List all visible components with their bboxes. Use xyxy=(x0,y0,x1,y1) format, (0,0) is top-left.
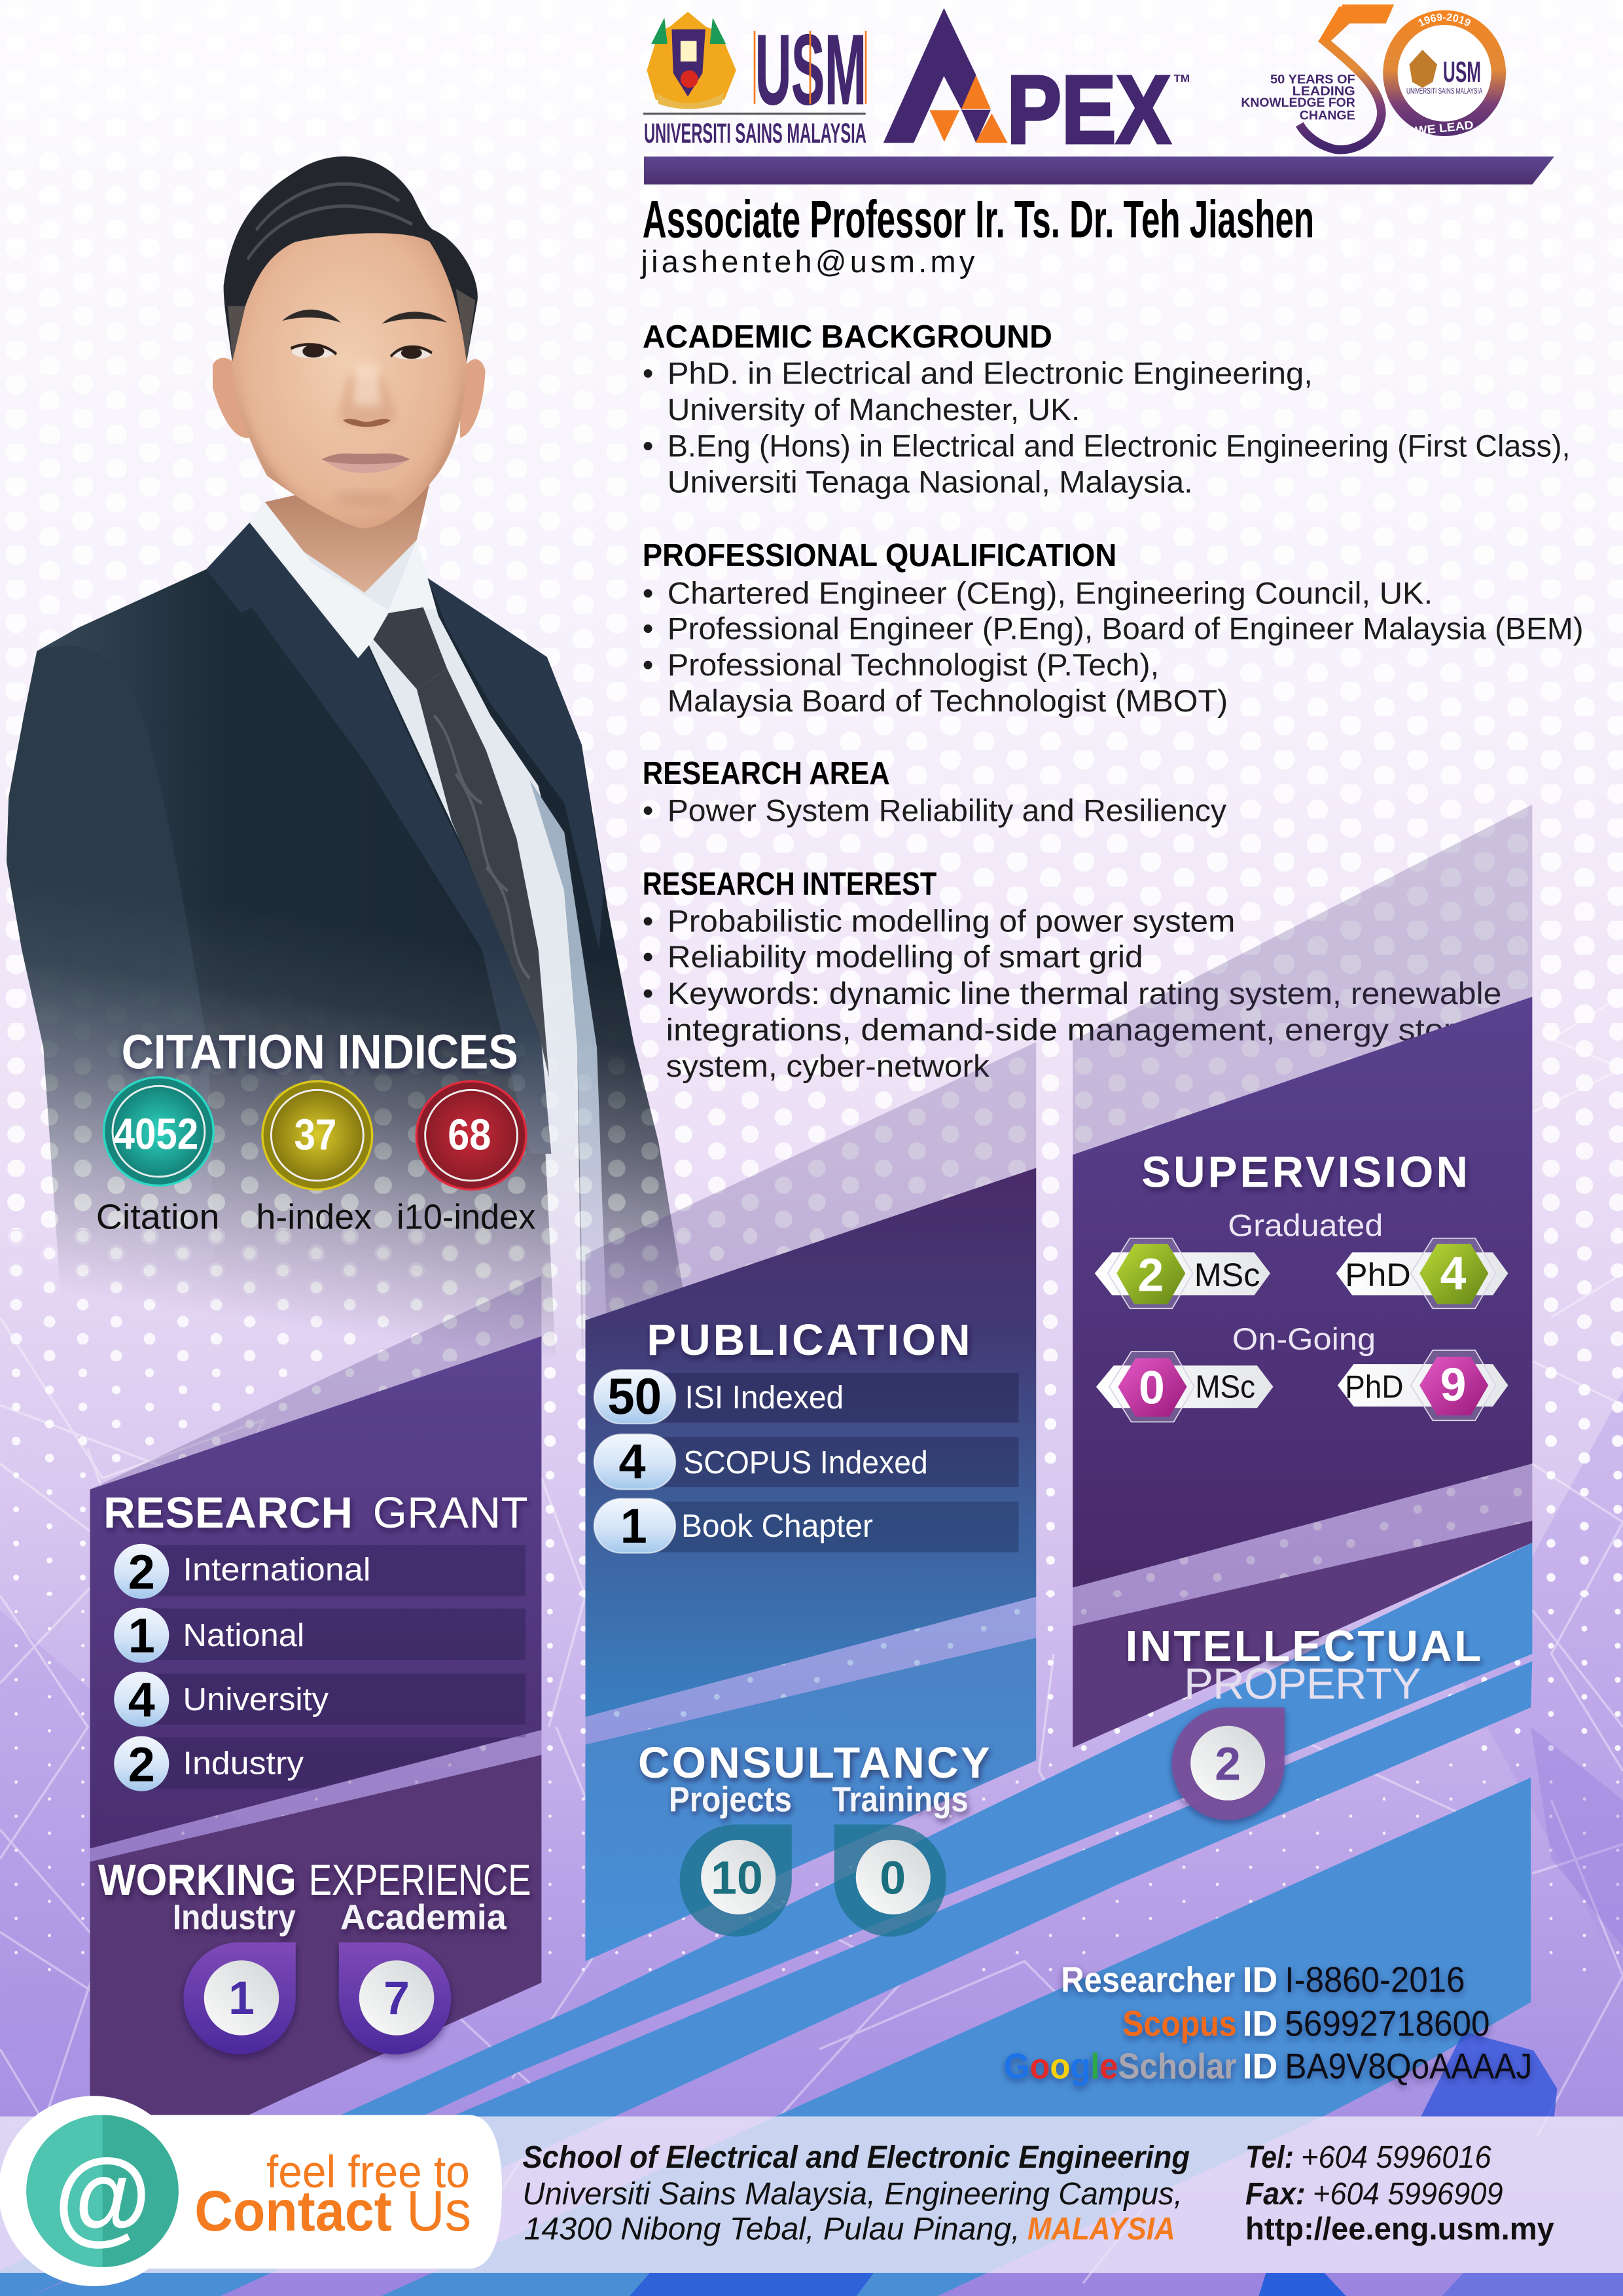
scopus id: Scopus xyxy=(1122,2003,1237,2044)
research interest xyxy=(643,866,1512,1084)
research grant heading: GRANT xyxy=(373,1488,528,1537)
professional qualification: Professional Technologist (P.Tech), xyxy=(668,648,1159,683)
university name: UNIVERSITI SAINS MALAYSIA xyxy=(644,118,866,149)
halftone dots over suit xyxy=(46,1067,679,1274)
contact details: http://ee.eng.usm.my xyxy=(1245,2211,1554,2246)
on-going MSc badge: MSc xyxy=(1195,1369,1255,1405)
ring xyxy=(1390,18,1499,129)
trainings label: Trainings xyxy=(832,1780,969,1820)
row: international: International xyxy=(183,1551,370,1587)
trademark: TM xyxy=(1173,73,1190,84)
usm wordmark: USM xyxy=(755,14,866,126)
researcher id: ID xyxy=(1243,1960,1277,2000)
academia label: Academia xyxy=(340,1897,507,1937)
academic background: • xyxy=(643,429,653,464)
academic background xyxy=(643,319,1570,500)
lower background bands xyxy=(0,1543,1623,2296)
apex wordmark: PEX xyxy=(1007,56,1171,164)
contact us: Contact Us xyxy=(194,2179,471,2243)
row: university xyxy=(114,1672,526,1727)
contact details: +604 5996909 xyxy=(1313,2176,1503,2212)
academia drop badge: 7 xyxy=(383,1972,410,2024)
academic background: • xyxy=(643,357,653,391)
graduated PhD badge: 4 xyxy=(1440,1247,1467,1300)
row: book chapter: 1 xyxy=(620,1499,647,1553)
trainings drop badge: 0 xyxy=(880,1852,906,1905)
tagline: LEADING xyxy=(1293,84,1355,98)
on-going PhD badge: 9 xyxy=(1440,1359,1466,1411)
projects label: Projects xyxy=(669,1780,792,1820)
graduated MSc badge: MSc xyxy=(1194,1256,1260,1293)
professional qualification: • xyxy=(643,577,653,611)
citation labels: i10-index xyxy=(397,1198,536,1237)
panel: research grant xyxy=(90,1276,541,1848)
panel: supervision xyxy=(1073,804,1532,1588)
google scholar id: Google xyxy=(1004,2045,1118,2086)
industry drop badge xyxy=(183,1942,296,2054)
industry label: Industry xyxy=(173,1897,296,1937)
professional qualification: Malaysia Board of Technologist (MBOT) xyxy=(668,684,1228,719)
researcher identifiers xyxy=(1004,1960,1532,2086)
mini crest xyxy=(1410,50,1437,88)
intellectual property heading: INTELLECTUAL xyxy=(1126,1622,1481,1671)
row: international: 2 xyxy=(128,1545,155,1599)
i10-index badge: 68 xyxy=(448,1111,491,1160)
citation indices xyxy=(96,1024,536,1237)
contact badge xyxy=(0,2096,502,2286)
row: industry: Industry xyxy=(183,1745,304,1781)
research area: • xyxy=(643,794,653,829)
graduated MSc badge: 2 xyxy=(1137,1249,1164,1301)
supervision heading: SUPERVISION xyxy=(1141,1148,1468,1197)
academic background: PhD. in Electrical and Electronic Engineering, xyxy=(668,357,1313,391)
school address: 14300 Nibong Tebal, Pulau Pinang, xyxy=(524,2211,1020,2246)
publication heading: PUBLICATION xyxy=(647,1316,971,1365)
ip drop badge xyxy=(1172,1708,1285,1820)
projects drop badge: 10 xyxy=(711,1852,763,1905)
research interest: Keywords: dynamic line thermal rating system, renewable xyxy=(668,977,1501,1011)
researcher id xyxy=(1061,1960,1465,2000)
researcher id: Researcher xyxy=(1061,1960,1235,2000)
professional qualification: Chartered Engineer (CEng), Engineering Council, UK. xyxy=(668,577,1433,611)
row: SCOPUS indexed: 4 xyxy=(619,1435,646,1489)
on-going PhD badge: PhD xyxy=(1345,1369,1404,1405)
contact details xyxy=(1245,2140,1554,2246)
on-going MSc badge xyxy=(1096,1352,1274,1422)
property subheading: PROPERTY xyxy=(1184,1659,1421,1708)
school address: MALAYSIA xyxy=(1027,2211,1175,2246)
academia drop badge xyxy=(339,1942,451,2054)
shirt collar xyxy=(249,502,391,658)
portrait: man in suit xyxy=(7,156,694,1359)
research area: Power System Reliability and Resiliency xyxy=(668,794,1226,829)
citation badge xyxy=(104,1077,213,1185)
panel: working experience xyxy=(90,1730,541,2115)
citation heading: CITATION INDICES xyxy=(122,1024,518,1079)
working experience heading xyxy=(98,1856,531,1905)
google scholar id: Scholar xyxy=(1118,2045,1237,2086)
graduated PhD badge xyxy=(1336,1238,1508,1308)
google scholar id xyxy=(1004,2045,1532,2086)
row: national: National xyxy=(183,1617,304,1653)
tagline: KNOWLEDGE FOR xyxy=(1241,96,1355,110)
research interest: • xyxy=(643,940,653,975)
research interest: RESEARCH INTEREST xyxy=(643,866,936,902)
professional qualification: Professional Engineer (P.Eng), Board of Engineer Malaysia (BEM) xyxy=(668,612,1584,647)
professional qualification xyxy=(643,537,1584,719)
logo: 50 years: UNIVERSITI SAINS MALAYSIA xyxy=(1406,86,1483,96)
tagline: CHANGE xyxy=(1300,109,1355,122)
icon: at sign xyxy=(26,2115,179,2267)
tagline: 50 YEARS OF xyxy=(1270,73,1355,86)
icon: university crest xyxy=(647,12,736,109)
contact details: Tel: xyxy=(1245,2140,1294,2175)
tagline xyxy=(1241,73,1355,122)
projects drop badge xyxy=(680,1824,792,1937)
h-index badge: 37 xyxy=(294,1111,336,1160)
scopus id: ID xyxy=(1243,2003,1277,2044)
numeral five xyxy=(1300,7,1387,150)
research interest: integrations, demand-side management, energy storage xyxy=(666,1013,1512,1048)
citation labels: h-index xyxy=(256,1198,372,1237)
mini wordmark: USM xyxy=(1443,56,1481,88)
scopus id: 56992718600 xyxy=(1285,2003,1489,2044)
row: SCOPUS indexed xyxy=(594,1435,1018,1490)
industry drop badge: 1 xyxy=(228,1972,255,2024)
professional qualification: • xyxy=(643,648,653,683)
research area: RESEARCH AREA xyxy=(643,755,890,791)
on-going label: On-Going xyxy=(1232,1321,1376,1356)
logo: USM xyxy=(643,12,866,149)
graduated MSc badge xyxy=(1095,1238,1270,1308)
panel: publication xyxy=(586,1042,1036,1717)
ip drop badge: 2 xyxy=(1215,1738,1241,1790)
on-going MSc badge: 0 xyxy=(1139,1362,1165,1414)
panel: intellectual property xyxy=(1073,1463,1532,1820)
email: jiashenteh@usm.my xyxy=(639,244,975,279)
row: university: University xyxy=(183,1681,329,1717)
school address xyxy=(522,2140,1190,2246)
professional qualification: PROFESSIONAL QUALIFICATION xyxy=(643,537,1116,573)
row: book chapter: Book Chapter xyxy=(681,1508,873,1544)
row: ISI indexed: 50 xyxy=(607,1367,662,1425)
feel free to: feel free to xyxy=(266,2146,470,2197)
academic background: Universiti Tenaga Nasional, Malaysia. xyxy=(668,465,1193,500)
graduated PhD badge: PhD xyxy=(1345,1256,1411,1293)
row: SCOPUS indexed: SCOPUS Indexed xyxy=(683,1444,928,1480)
row: ISI indexed xyxy=(594,1367,1018,1425)
research grant heading xyxy=(103,1488,528,1537)
research interest: Probabilistic modelling of power system xyxy=(668,904,1235,939)
row: national: 1 xyxy=(128,1609,155,1663)
research interest: • xyxy=(643,977,653,1011)
working experience heading: WORKING xyxy=(98,1856,296,1905)
working experience heading: EXPERIENCE xyxy=(309,1856,531,1905)
contact details: Fax: xyxy=(1245,2176,1306,2212)
h-index badge xyxy=(262,1081,372,1189)
ring motto: WE LEAD xyxy=(1414,118,1474,137)
academic background: ACADEMIC BACKGROUND xyxy=(643,319,1052,355)
row: ISI indexed: ISI Indexed xyxy=(685,1379,844,1415)
professional qualification: • xyxy=(643,612,653,647)
trainings drop badge xyxy=(834,1824,946,1937)
profile text xyxy=(643,319,1584,1084)
research interest: • xyxy=(643,904,653,939)
footer strip xyxy=(0,2117,1623,2273)
row: international xyxy=(114,1544,526,1599)
citation labels: Citation xyxy=(96,1198,219,1237)
research grant heading: RESEARCH xyxy=(103,1488,353,1537)
google scholar id: ID xyxy=(1243,2045,1277,2086)
icon: at sign: @ xyxy=(54,2137,151,2255)
google scholar id: BA9V8QoAAAAJ xyxy=(1285,2045,1532,2086)
scopus id xyxy=(1122,2003,1489,2044)
i10-index badge xyxy=(416,1081,526,1189)
on-going PhD badge xyxy=(1338,1350,1508,1420)
row: book chapter xyxy=(594,1499,1018,1553)
research interest: system, cyber-network xyxy=(666,1049,990,1084)
academic background: University of Manchester, UK. xyxy=(668,393,1080,427)
header bar xyxy=(644,156,1554,185)
graduated label: Graduated xyxy=(1228,1208,1383,1242)
row: university: 4 xyxy=(128,1673,155,1727)
consultancy heading: CONSULTANCY xyxy=(638,1738,990,1787)
logo: APEX xyxy=(883,8,1190,164)
citation badge: 4052 xyxy=(114,1109,198,1158)
school address: Universiti Sains Malaysia, Engineering Campus, xyxy=(522,2176,1183,2212)
research area xyxy=(643,755,1226,829)
contact details: +604 5996016 xyxy=(1301,2140,1491,2175)
researcher id: I-8860-2016 xyxy=(1285,1960,1465,2000)
ring text: 1969-2019 xyxy=(1418,13,1471,27)
row: industry xyxy=(114,1734,526,1791)
academic background: B.Eng (Hons) in Electrical and Electronic Engineering (First Class), xyxy=(668,429,1570,464)
citation labels xyxy=(96,1198,536,1237)
logo: 50 years xyxy=(1241,4,1507,154)
panel: consultancy xyxy=(586,1597,1036,1962)
school address: School of Electrical and Electronic Engineering xyxy=(522,2140,1190,2175)
research interest: Reliability modelling of smart grid xyxy=(668,940,1143,975)
row: national xyxy=(114,1608,526,1663)
row: industry: 2 xyxy=(128,1737,155,1791)
